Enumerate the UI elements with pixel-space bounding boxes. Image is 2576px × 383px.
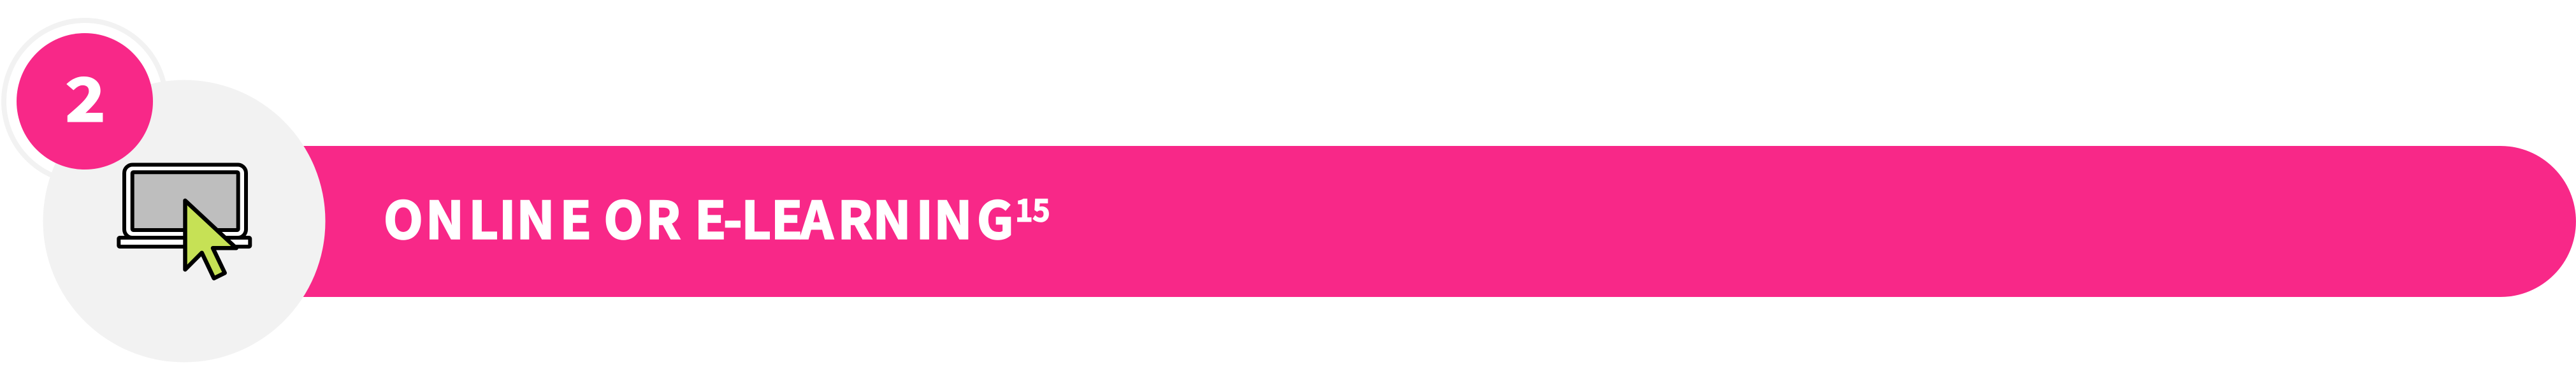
laptop base — [119, 238, 250, 247]
icon backdrop circle — [43, 80, 325, 362]
footnote number: 15 — [1015, 186, 1050, 231]
number badge outer ring — [4, 20, 166, 182]
laptop screen — [133, 172, 238, 230]
number badge — [17, 33, 153, 170]
step number: 2 — [66, 52, 105, 138]
heading: online or e-learning: ONLINE OR E-LEARNING — [384, 180, 1013, 254]
panel: pink title bar — [191, 146, 2576, 297]
cursor arrow — [185, 201, 236, 278]
laptop lid — [124, 164, 246, 238]
icon: laptop with cursor — [119, 164, 250, 278]
